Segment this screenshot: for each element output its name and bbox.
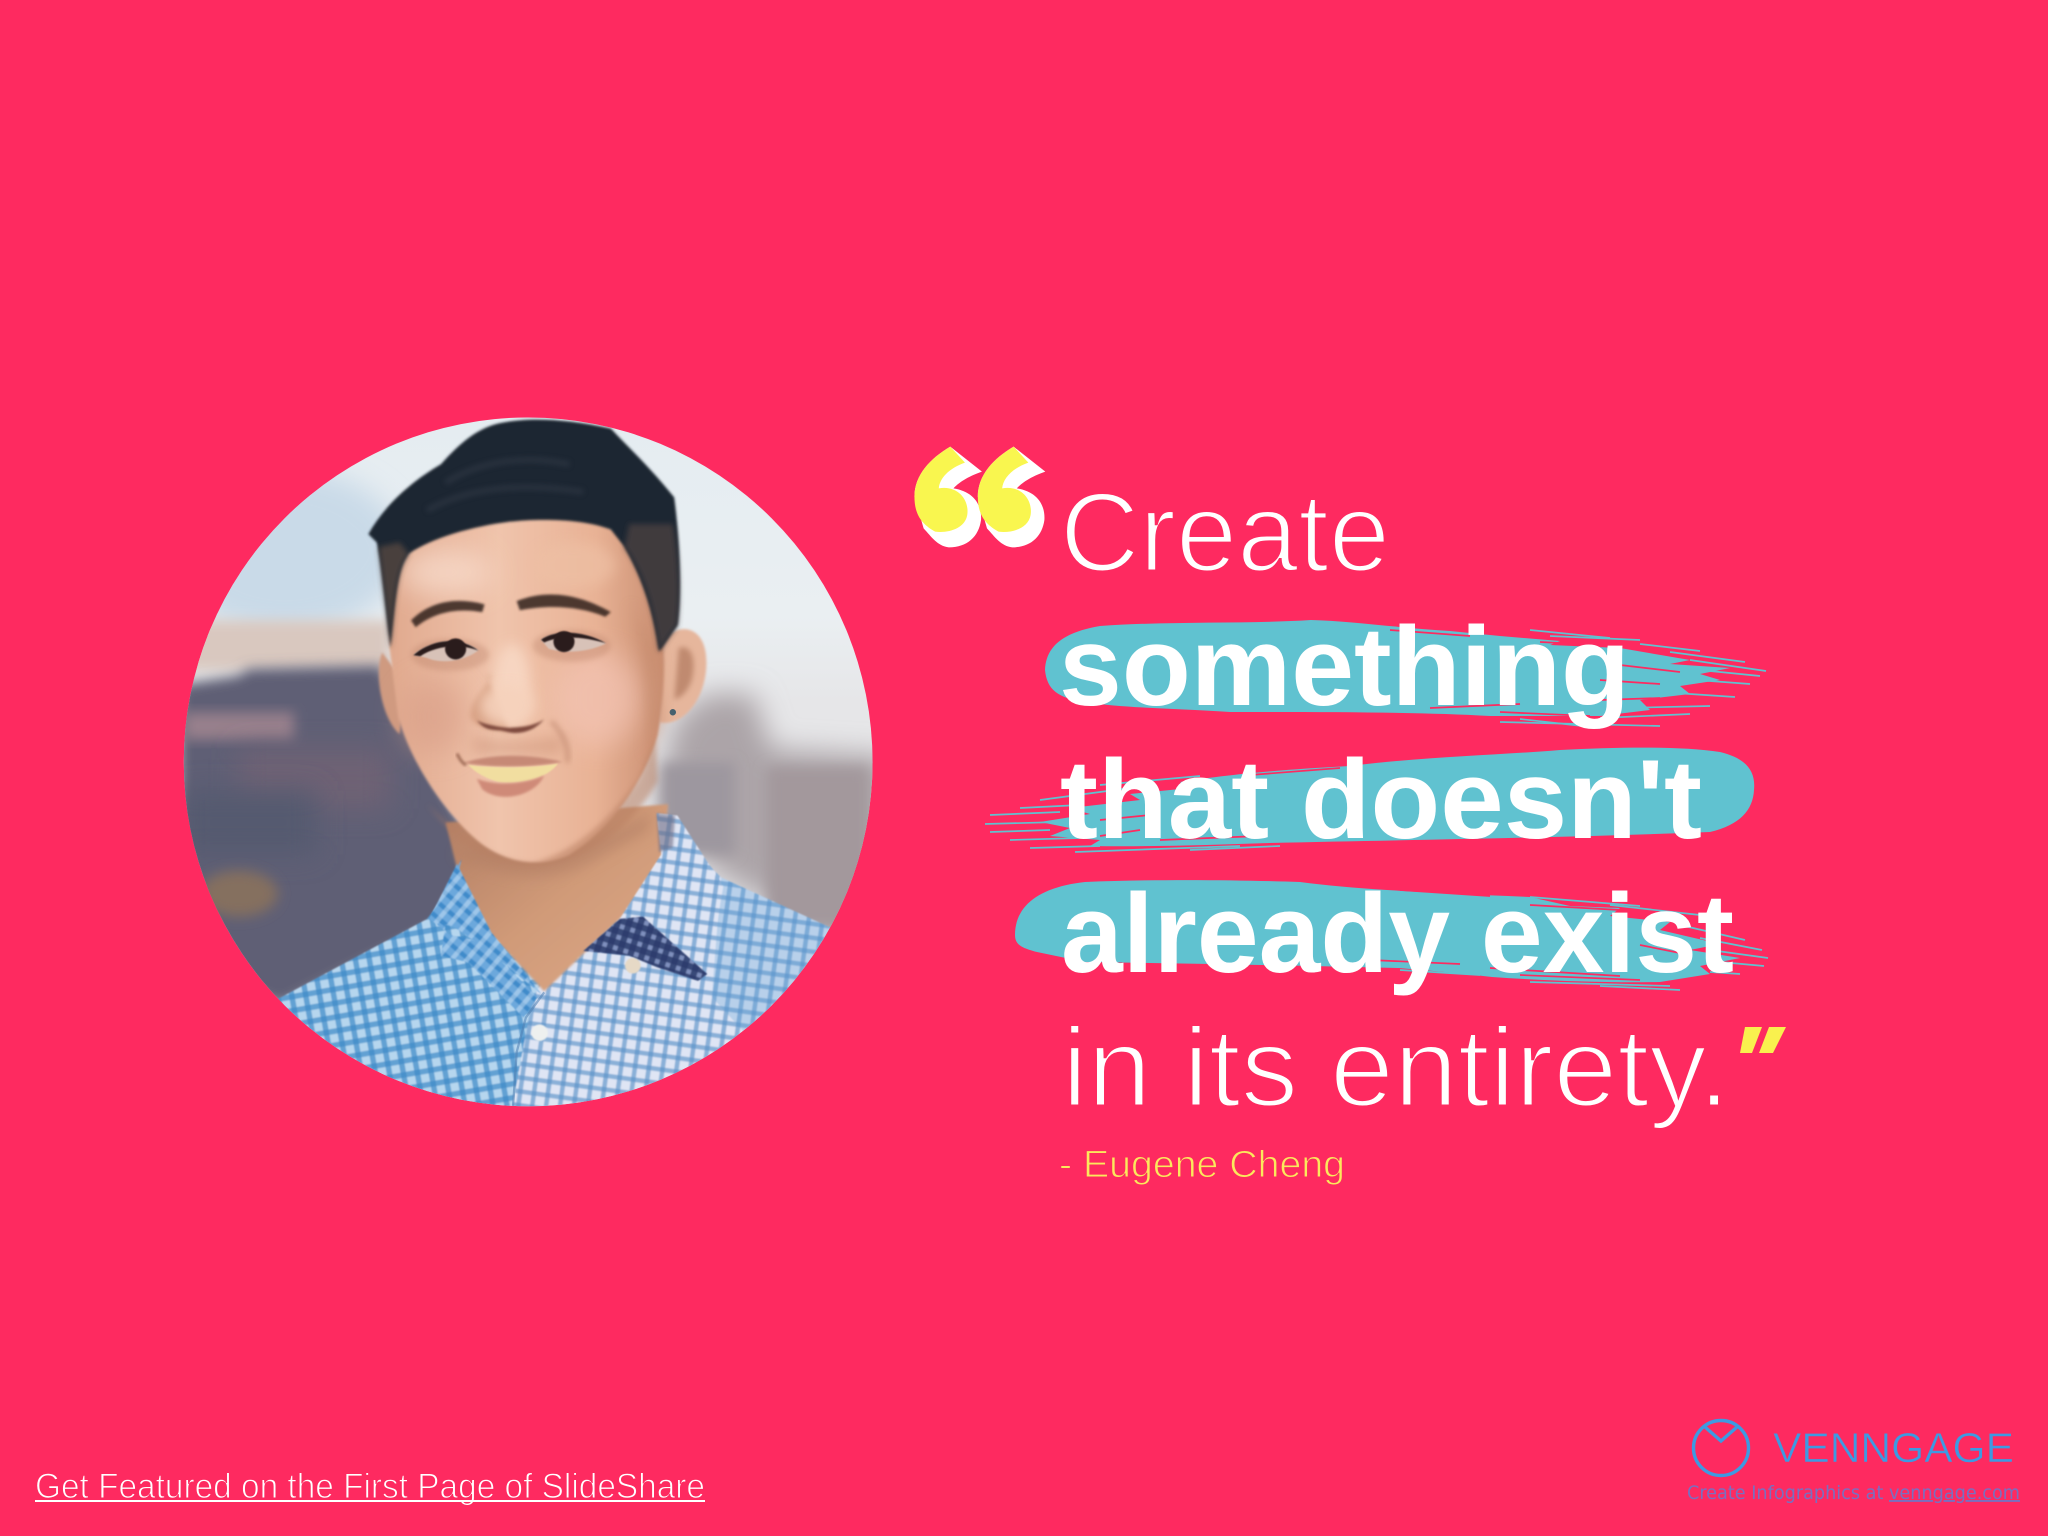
face (389, 508, 664, 862)
footer link: Get Featured on the First Page of SlideShare (35, 1467, 705, 1506)
icon: closing quote mark (1740, 1027, 1786, 1053)
attribution: - Eugene Cheng (1059, 1144, 1345, 1186)
eye creases (411, 639, 489, 671)
line: in its entirety.: in its entirety. (1062, 1005, 1730, 1130)
hair (368, 420, 680, 652)
line: that doesn't: that doesn't (1060, 737, 1702, 862)
tagline: Create Infographics at venngage.com (1687, 1482, 2020, 1504)
shirt (278, 858, 830, 1106)
heading: quote text (1059, 470, 1734, 1130)
eyes (413, 642, 479, 661)
mouth (464, 756, 563, 766)
eyebrows (411, 601, 485, 627)
line: something: something (1059, 604, 1630, 729)
brush stroke: that doesn't (985, 748, 1754, 852)
panel: circular portrait photo (184, 418, 873, 1106)
brush stroke: already exist (1015, 880, 1768, 990)
venngage logo (1687, 1420, 2020, 1504)
ears (377, 652, 402, 735)
icon: venngage mark (1694, 1420, 1748, 1476)
nose (471, 676, 510, 733)
wordmark: VENNGAGE (1773, 1424, 2014, 1471)
icon: opening quote mark (914, 447, 1045, 547)
line: already exist: already exist (1061, 871, 1734, 996)
neck (446, 804, 668, 991)
collars (429, 859, 537, 1018)
brush stroke: something (1045, 620, 1766, 728)
line: Create: Create (1060, 470, 1390, 595)
